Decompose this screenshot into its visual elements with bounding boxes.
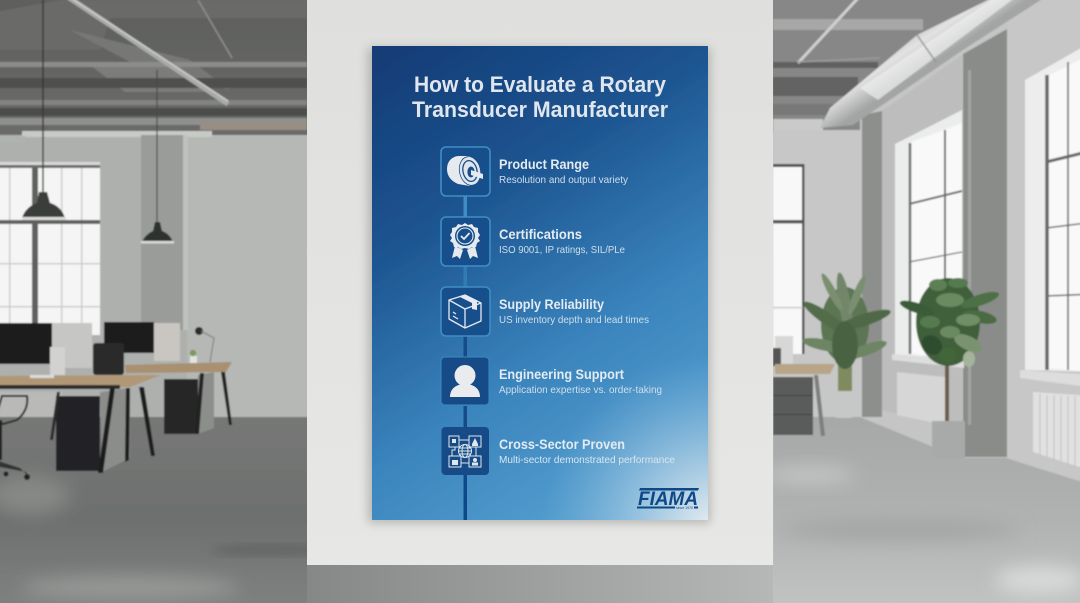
icon: person (441, 357, 489, 405)
logo: FIAMA: since 1970 (676, 505, 694, 510)
poster panel (372, 46, 708, 520)
desks (0, 322, 232, 480)
label: engineering support: Application expertise vs. order-taking (499, 384, 662, 396)
label: product range (499, 157, 629, 186)
label: product range: Product Range (499, 157, 589, 172)
plant back (800, 271, 892, 418)
label: engineering support (499, 367, 662, 396)
window (0, 162, 100, 165)
label: certifications (499, 227, 625, 256)
desk right (775, 336, 793, 366)
item: cross-sector proven (442, 427, 675, 475)
icon: package box (441, 287, 490, 336)
side window 2 (1025, 40, 1080, 372)
logo: FIAMA: FIAMA (638, 489, 698, 510)
plant front (898, 278, 1001, 458)
floor (773, 417, 1080, 603)
label: cross-sector proven: Multi-sector demonstrated performance (499, 454, 675, 466)
label: cross-sector proven (499, 437, 675, 466)
floor (0, 417, 310, 603)
ceiling (770, 0, 1010, 132)
title: Transducer Manufacturer (412, 97, 668, 122)
label: engineering support: Engineering Support (499, 367, 624, 382)
radiators (1033, 392, 1080, 472)
side walls (882, 55, 962, 430)
side window 1 (895, 110, 962, 360)
desk lamp and pot (195, 327, 203, 335)
icon: rotary encoder (441, 147, 490, 196)
icon: certification badge (441, 217, 490, 266)
item: product range (441, 147, 629, 196)
title (412, 72, 668, 122)
column (141, 135, 187, 330)
office chair (0, 396, 27, 424)
gallery wall (307, 0, 773, 565)
left office scene (0, 0, 330, 603)
label: supply reliability: Supply Reliability (499, 297, 604, 312)
timeline connector (464, 196, 467, 520)
icon: sector network (442, 427, 489, 475)
pendant lamps (42, 0, 44, 192)
right office scene (765, 0, 1080, 603)
label: certifications: Certifications (499, 227, 582, 242)
poster shadow (368, 48, 710, 523)
title: How to Evaluate a Rotary (414, 72, 667, 97)
label: cross-sector proven: Cross-Sector Proven (499, 437, 625, 452)
item: engineering support (441, 357, 662, 405)
label: product range: Resolution and output variety (499, 174, 629, 186)
label: certifications: ISO 9001, IP ratings, SIL/PLe (499, 244, 625, 256)
label: supply reliability: US inventory depth and lead times (499, 314, 649, 326)
item: supply reliability (441, 287, 649, 336)
duct (820, 0, 1050, 128)
back wall and window (773, 130, 863, 420)
wall base floor (307, 565, 773, 603)
label: supply reliability (499, 297, 649, 326)
item: certifications (441, 217, 625, 266)
